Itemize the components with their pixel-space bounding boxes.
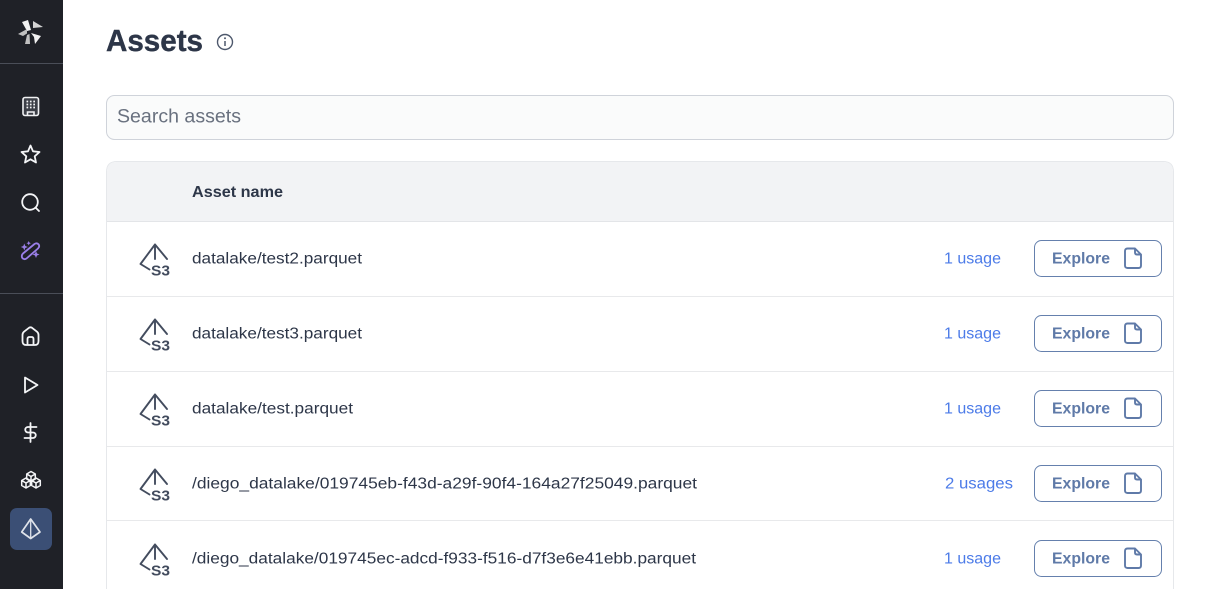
search box: Search assets [117, 106, 241, 128]
icon: s3: S3 [151, 262, 170, 280]
button: explore: Explore [1052, 250, 1110, 268]
icon: logo [18, 20, 43, 44]
sidebar [0, 0, 63, 589]
icon: s3 [140, 394, 170, 430]
button: explore [1034, 466, 1162, 502]
icon: s3: S3 [151, 488, 170, 504]
icon: s3: S3 [151, 338, 170, 354]
table [106, 162, 1174, 589]
row: test: 1 usage [944, 400, 1001, 418]
row: test2: 1 usage [944, 250, 1001, 268]
icon: s3 [140, 470, 170, 504]
search box [106, 96, 1174, 140]
icon: s3 [140, 320, 170, 354]
row: test: datalake/test.parquet [192, 400, 354, 418]
row: test [140, 390, 1162, 430]
icon: s3: S3 [151, 412, 170, 430]
icon: building [23, 98, 38, 116]
button: explore [1034, 316, 1162, 352]
row: diego 2 [140, 540, 1162, 580]
title: Assets [106, 23, 203, 58]
button: explore [1034, 240, 1162, 276]
row: test3 [140, 316, 1162, 354]
icon: cubes [22, 472, 40, 488]
table header [107, 162, 1173, 222]
row: diego 2: 1 usage [944, 550, 1001, 568]
row: diego 1: /diego_datalake/019745eb-f43d-a29f-90f4-164a27f25049.parquet [192, 476, 698, 492]
icon: magic wand [21, 241, 40, 259]
button: explore [1034, 540, 1162, 576]
row: test2 [140, 240, 1162, 280]
icon: s3: S3 [151, 562, 170, 580]
icon: home [22, 327, 38, 345]
active nav item: assets [10, 508, 52, 550]
icon: info [218, 34, 232, 50]
table header: Asset name [192, 184, 283, 201]
row: test3: 1 usage [944, 326, 1001, 342]
button: explore: Explore [1052, 476, 1110, 492]
row: diego 1 [140, 466, 1162, 504]
row: diego 1: 2 usages [945, 476, 1013, 492]
icon: dollar [24, 423, 36, 442]
icon: s3 [140, 544, 170, 580]
icon: s3 [140, 244, 170, 280]
icon: search [22, 194, 39, 211]
row: test2: datalake/test2.parquet [192, 250, 363, 268]
button: explore: Explore [1052, 326, 1110, 342]
button: explore [1034, 390, 1162, 426]
row: diego 2: /diego_datalake/019745ec-adcd-f933-f516-d7f3e6e41ebb.parquet [192, 550, 697, 568]
icon: star [22, 146, 40, 162]
button: explore: Explore [1052, 400, 1110, 418]
icon: play [25, 378, 38, 392]
row: test3: datalake/test3.parquet [192, 326, 363, 342]
button: explore: Explore [1052, 550, 1110, 568]
